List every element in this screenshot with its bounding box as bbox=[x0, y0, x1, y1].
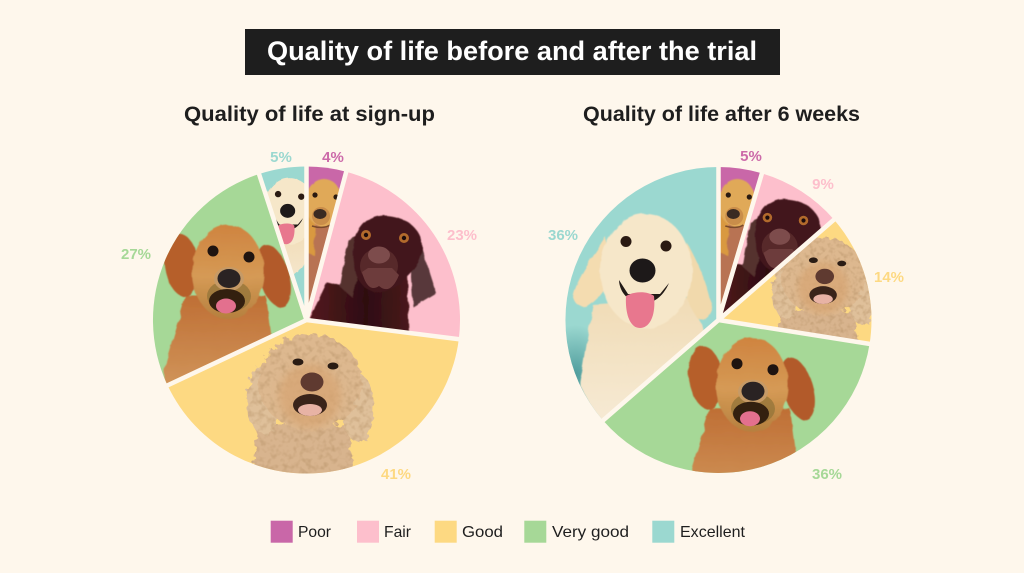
percentage labels: at sign-up: 23% bbox=[447, 227, 477, 244]
legend item: good bbox=[435, 521, 503, 543]
legend item: very good: Very good bbox=[552, 524, 629, 541]
percentage labels: after 6 weeks: 36% bbox=[812, 466, 842, 483]
slice: very good 27% bbox=[153, 174, 304, 384]
percentage labels: after 6 weeks: 9% bbox=[812, 176, 834, 193]
pie chart: after 6 weeks bbox=[565, 167, 872, 473]
pie chart: at sign-up bbox=[153, 166, 460, 474]
percentage labels: after 6 weeks bbox=[548, 148, 904, 483]
slice: good 14% bbox=[724, 222, 872, 342]
slice: good 41% bbox=[168, 322, 458, 474]
percentage labels: after 6 weeks: 14% bbox=[874, 269, 904, 286]
legend item: poor: Poor bbox=[298, 524, 332, 541]
percentage labels: at sign-up bbox=[121, 149, 477, 483]
title: Quality of life before and after the trial bbox=[267, 36, 757, 66]
legend item: good: Good bbox=[462, 524, 503, 541]
slice: excellent 36% bbox=[565, 167, 716, 418]
legend item: fair: Fair bbox=[384, 524, 412, 541]
legend item: excellent bbox=[652, 521, 746, 543]
percentage labels: after 6 weeks: 36% bbox=[548, 227, 578, 244]
legend item: very good bbox=[524, 521, 629, 543]
percentage labels: at sign-up: 27% bbox=[121, 246, 151, 263]
percentage labels: at sign-up: 5% bbox=[270, 149, 292, 166]
slice: fair 23% bbox=[310, 172, 460, 337]
legend item: poor bbox=[271, 521, 332, 543]
legend item: fair bbox=[357, 521, 412, 543]
slice: poor 5% bbox=[720, 167, 760, 304]
percentage labels: at sign-up: 41% bbox=[381, 466, 411, 483]
legend bbox=[271, 521, 746, 543]
heading: quality of life after 6 weeks: Quality of life after 6 weeks bbox=[583, 103, 860, 126]
percentage labels: at sign-up: 4% bbox=[322, 149, 344, 166]
heading: quality of life at sign-up: Quality of life at sign-up bbox=[184, 103, 435, 126]
slice: excellent 5% bbox=[261, 166, 304, 306]
slice: poor 4% bbox=[308, 166, 344, 303]
slice: fair 9% bbox=[722, 174, 832, 314]
legend item: excellent: Excellent bbox=[680, 524, 746, 541]
title bbox=[245, 29, 780, 75]
percentage labels: after 6 weeks: 5% bbox=[740, 148, 762, 165]
slice: very good 36% bbox=[604, 322, 870, 473]
